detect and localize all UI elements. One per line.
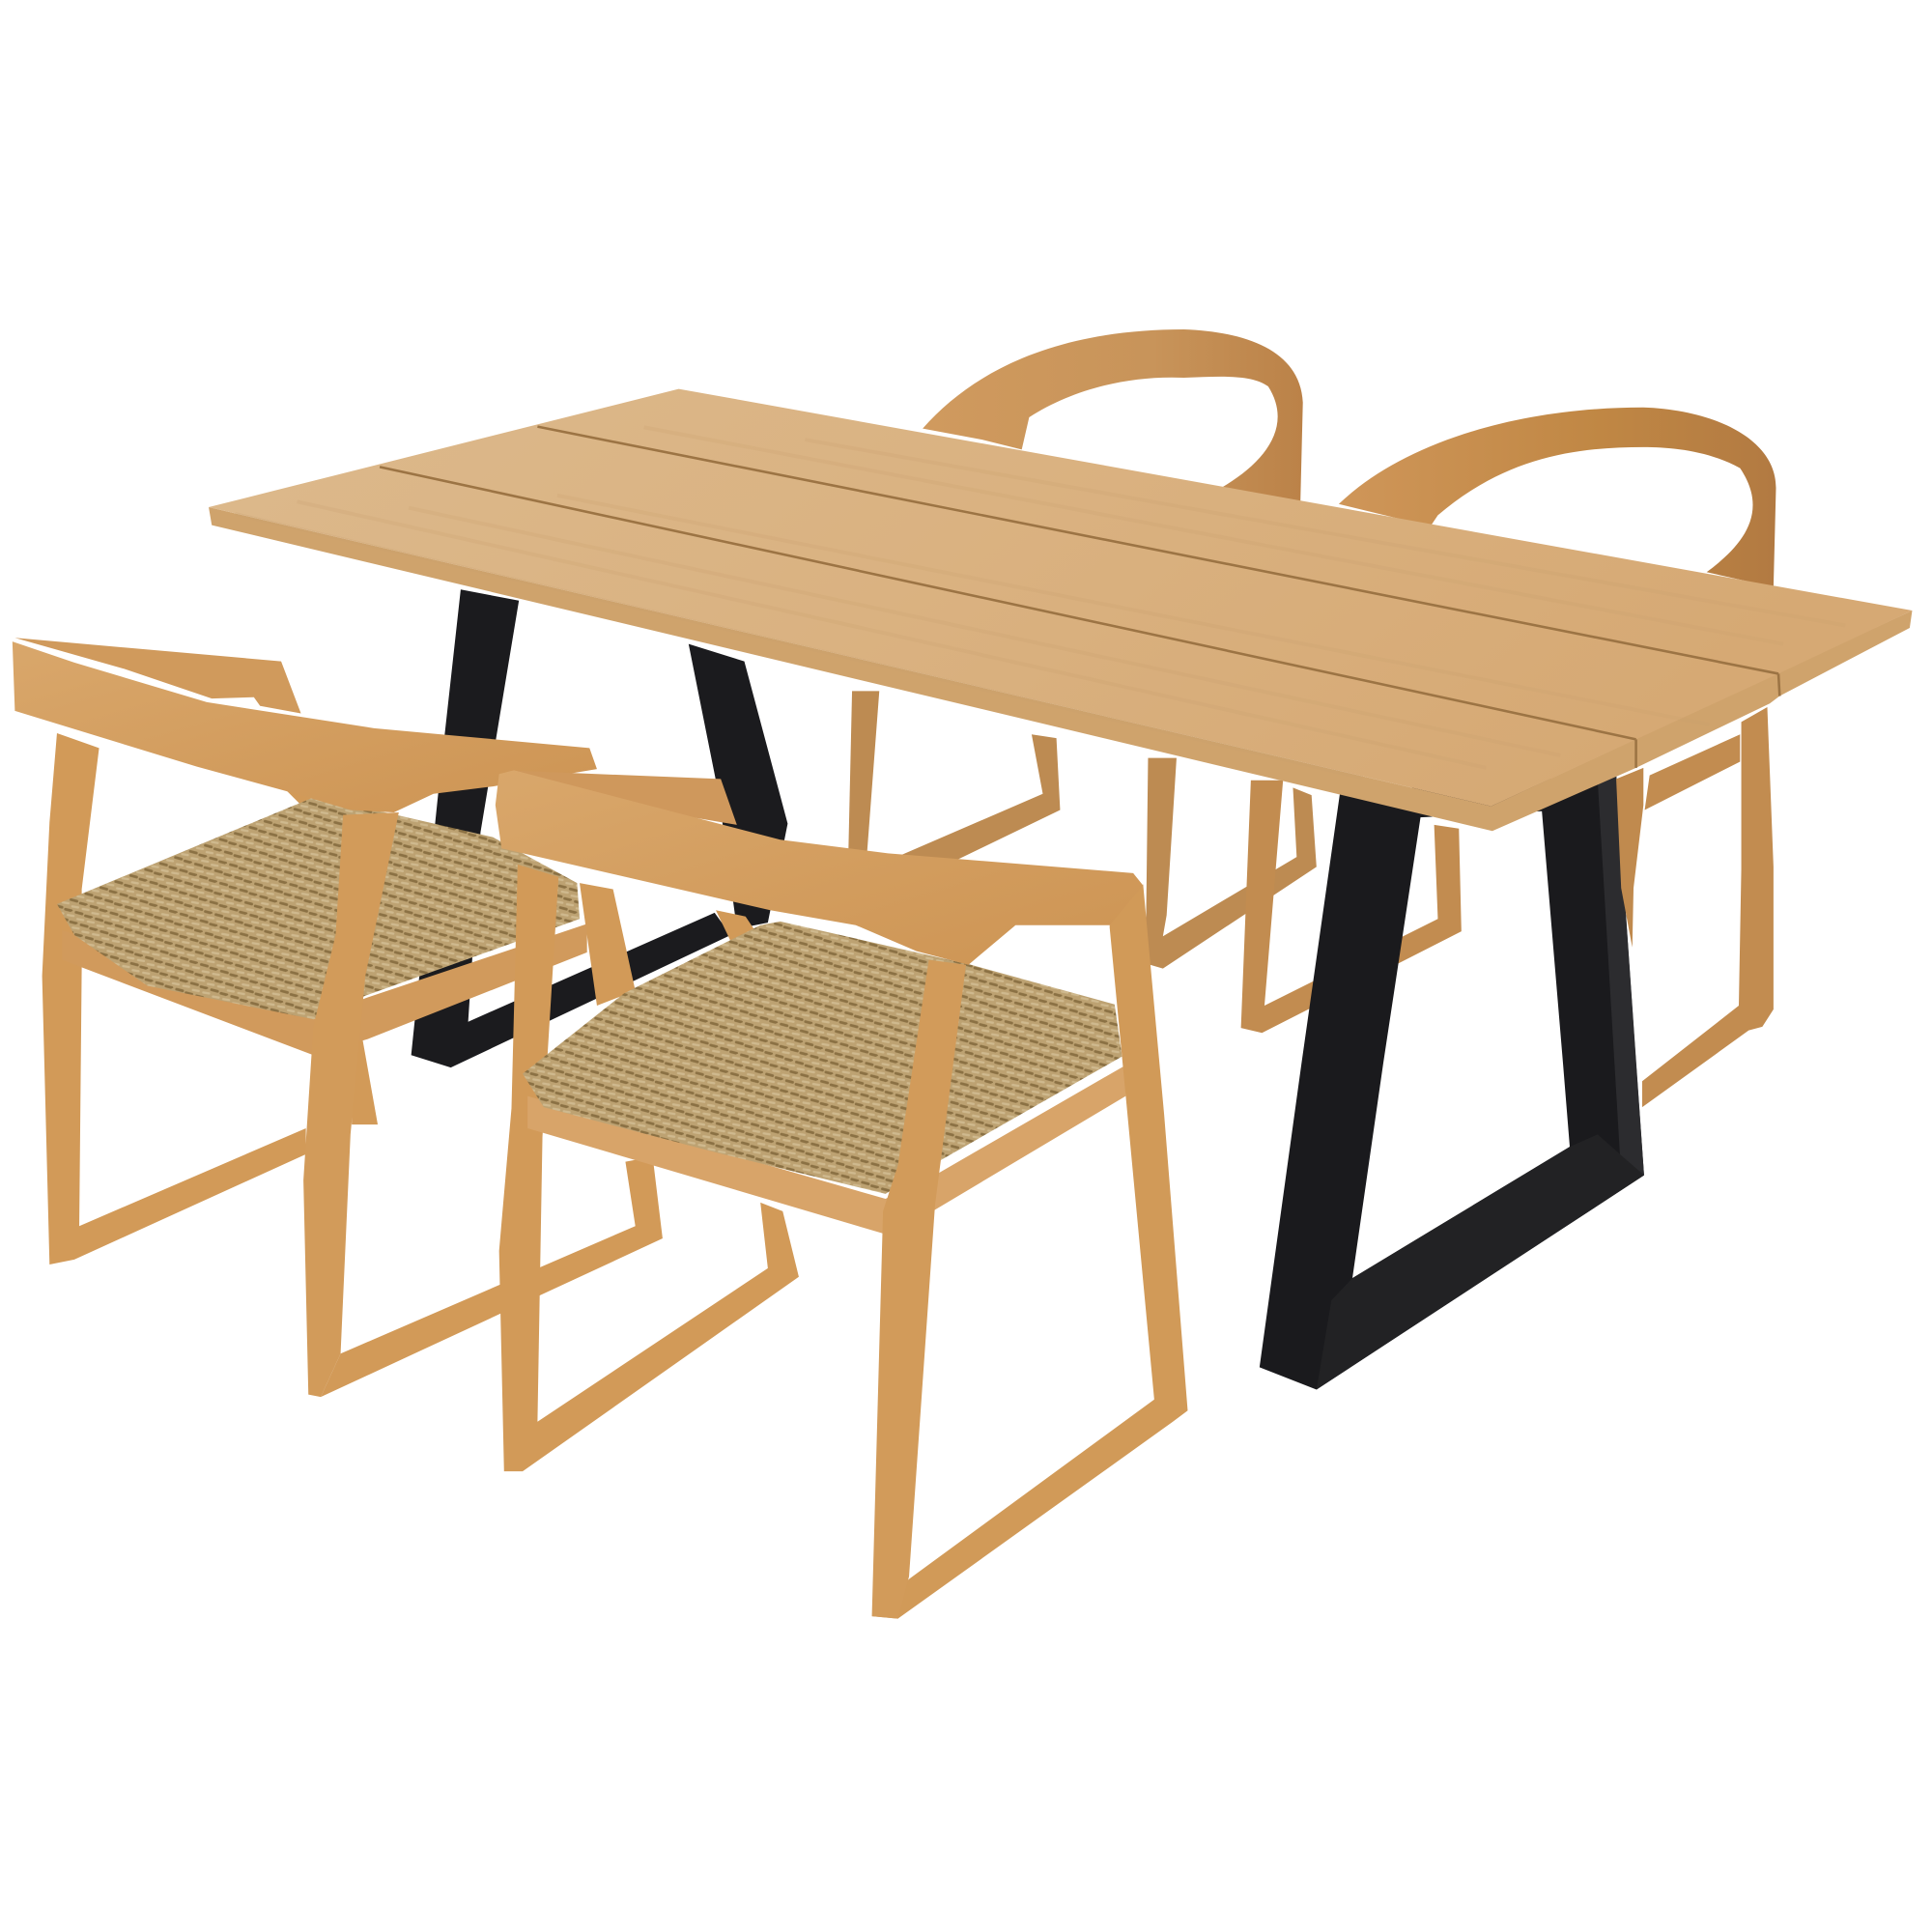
front chair right post and sled [872,884,1187,1619]
left chair far rail [14,638,301,713]
left chair front rail [13,641,597,812]
front chair main post [872,960,966,1619]
back centre chair curved rail [923,329,1303,503]
table top surface [209,389,1912,807]
left chair rope seat [57,796,580,1019]
left chair legs and sleds [43,733,663,1397]
plank gaps [380,427,1779,768]
front chair far rail [506,770,737,825]
left chair main post [303,812,399,1397]
front chair rear legs and sled [499,865,799,1471]
table front and end faces [209,507,1912,831]
back centre chair legs [848,691,1317,969]
table leg: back black frame [412,589,787,1067]
back right chair curved rail and front post [1339,408,1776,948]
table top [209,389,1912,831]
front chair front rail [496,770,1143,965]
chair: front centre [496,770,1187,1619]
chair: front left [13,638,663,1397]
table leg: front black frame [1260,774,1644,1389]
chair: back right [1241,707,1774,1107]
wood grain [236,427,1845,778]
chair: back centre [848,329,1317,969]
left chair seat rails [62,923,587,1055]
back right chair legs and seat rail [1241,707,1774,1107]
front chair rope seat [523,922,1122,1194]
front chair seat rails [527,1065,1125,1234]
